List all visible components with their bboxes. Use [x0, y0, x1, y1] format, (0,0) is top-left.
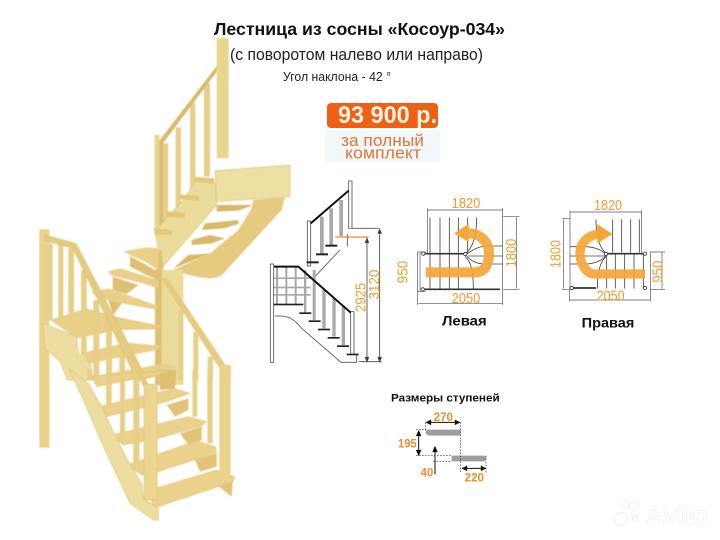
dimension 1820: 1820 — [594, 198, 622, 214]
dashed guides — [416, 422, 486, 472]
left handrail — [45, 235, 145, 380]
central column — [155, 270, 183, 385]
price badge: комплект — [345, 144, 421, 162]
illustration: wooden staircase — [39, 38, 290, 520]
handrails — [274, 191, 351, 313]
step blocks — [153, 177, 214, 235]
left post — [39, 229, 49, 448]
middle winder flight — [39, 229, 231, 448]
dimension 3120: 3120 — [367, 270, 383, 300]
balusters — [274, 200, 345, 345]
subtitle: (с поворотом налево или направо) — [230, 45, 483, 64]
side elevation drawing — [270, 181, 383, 362]
upper and lower step profiles — [426, 430, 486, 461]
dimension values: 270 — [434, 410, 453, 424]
dimension lines — [359, 229, 382, 362]
dimension 950: 950 — [651, 261, 667, 283]
upper flight railing — [155, 38, 229, 237]
front balusters — [87, 370, 213, 467]
label: right: Правая — [582, 314, 634, 330]
dimension arrows — [417, 420, 485, 474]
slope angle note: Угол наклона - 42 ° — [283, 69, 391, 84]
orange landing line — [335, 235, 369, 239]
rear balusters — [47, 243, 74, 330]
dimension 950: 950 — [395, 261, 411, 283]
right rail and balusters — [161, 277, 227, 372]
stair treads — [274, 245, 359, 355]
treads — [92, 370, 235, 508]
dimension values: 40 — [421, 465, 434, 479]
dimension 2050: 2050 — [597, 289, 625, 305]
diagonal supports — [167, 398, 233, 497]
upper stringer face — [155, 182, 217, 268]
dimension 2925: 2925 — [353, 283, 369, 312]
label: left: Левая — [442, 312, 487, 328]
front balusters — [81, 270, 125, 380]
heading: Размеры ступеней — [391, 393, 500, 405]
plan dimension lines — [417, 208, 519, 305]
plan rails — [423, 254, 500, 289]
watermark: Avito logo — [614, 500, 708, 530]
orange direction arrow — [426, 233, 489, 272]
next treads — [80, 343, 163, 363]
watermark: Avito logo: Avito — [646, 500, 708, 530]
right end post — [219, 368, 231, 474]
handrail end — [134, 368, 148, 387]
posts and outline — [270, 181, 379, 362]
landing beam — [215, 165, 290, 202]
outer curved stringer — [173, 197, 285, 278]
orange direction arrow — [580, 234, 645, 274]
plan diagram: right-turn version — [549, 198, 667, 330]
stringer — [68, 368, 158, 520]
dimension 1800: 1800 — [504, 239, 520, 267]
winder treads — [92, 247, 158, 315]
dimension values — [398, 410, 484, 484]
plan dimension lines — [562, 211, 665, 302]
title: Лестница из сосны «Косоур-034» — [214, 19, 505, 39]
arrow head — [454, 224, 469, 242]
dimension values: 195 — [398, 436, 417, 450]
dimension 1820: 1820 — [452, 196, 480, 212]
price badge: 93 900 р. — [338, 102, 437, 129]
front newel post — [144, 384, 157, 500]
plan diagram: left-turn version — [395, 196, 520, 328]
lower flight — [68, 368, 235, 520]
landing and upper stringers — [153, 165, 290, 290]
price badge: за полный — [341, 131, 424, 150]
dimension 1800: 1800 — [549, 240, 565, 268]
stringer top section — [43, 323, 93, 380]
step dimensions diagram — [391, 393, 500, 484]
dimension values: 220 — [465, 470, 484, 484]
plan steps — [570, 219, 643, 289]
mid landing tread — [50, 308, 162, 338]
central posts at the turn — [155, 250, 167, 290]
price badge — [325, 102, 440, 162]
arrow head — [597, 224, 612, 243]
plan rails — [572, 254, 647, 288]
central column base — [158, 370, 177, 390]
plan steps — [430, 217, 503, 289]
dimension 2050: 2050 — [452, 291, 480, 307]
upper flight winder undersides — [173, 205, 253, 268]
